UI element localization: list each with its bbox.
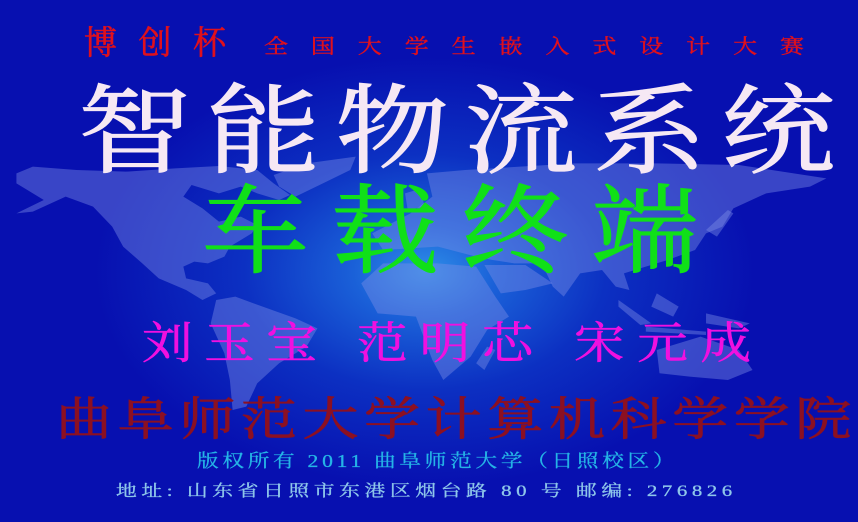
institution: 曲阜师范大学计算机科学学院 <box>56 395 851 446</box>
heading: contest name <box>84 25 805 62</box>
copyright line: 版权所有 2011 曲阜师范大学（日照校区） <box>197 452 675 472</box>
authors: 宋元成 <box>574 320 751 368</box>
world map <box>16 157 826 410</box>
heading: contest name: 博创杯 <box>84 25 227 62</box>
authors <box>142 320 751 368</box>
address line: 地址: 山东省日照市东港区烟台路 80 号 邮编: 276826 <box>116 482 732 500</box>
authors: 刘玉宝 <box>142 320 317 368</box>
authors: 范明芯 <box>357 320 535 368</box>
subtitle: 车载终端 <box>202 179 698 287</box>
title: 智能物流系统 <box>78 79 835 186</box>
heading: contest name: 全国大学生嵌入式设计大赛 <box>264 35 805 58</box>
